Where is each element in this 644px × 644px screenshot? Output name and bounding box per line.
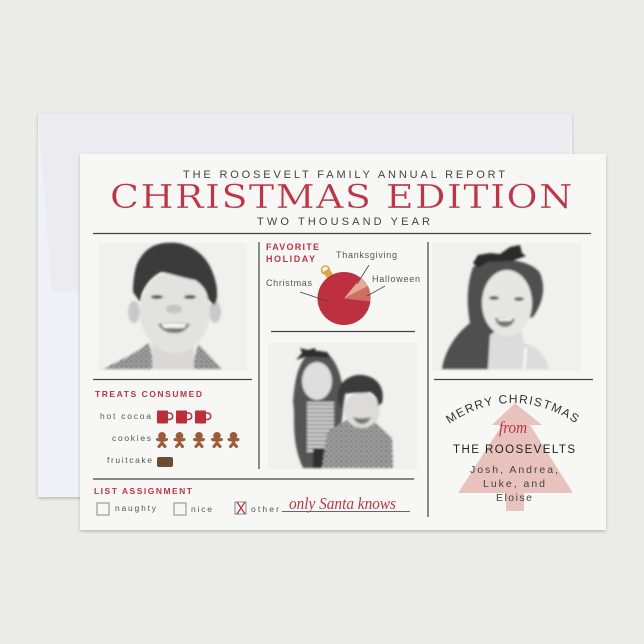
photo: girl [432, 243, 582, 371]
report subtitle: THE ROOSEVELT FAMILY ANNUAL REPORT [183, 169, 505, 181]
pie labels: Christmas [266, 278, 312, 288]
header text block [110, 169, 572, 228]
heading: list assignment: LIST ASSIGNMENT [94, 486, 193, 496]
row: fruitcake: fruitcake [107, 455, 152, 465]
pie chart ornament [318, 272, 371, 325]
names: Eloise [496, 492, 532, 504]
envelope [38, 113, 572, 497]
heading: favorite holiday: HOLIDAY [266, 254, 315, 264]
card panel [80, 154, 606, 530]
panel: treats consumed [95, 389, 238, 467]
family name: THE ROOSEVELTS [453, 444, 575, 456]
names [470, 464, 558, 504]
option: nice [174, 503, 212, 515]
panel: list assignment [94, 486, 410, 515]
option: other checked: other [251, 504, 279, 514]
pie labels: Thanksgiving [336, 250, 397, 260]
names: Luke, and [483, 478, 545, 490]
script from: from [499, 418, 527, 437]
row: cookies [112, 432, 238, 446]
grid rules [93, 234, 593, 517]
row: hot cocoa [100, 410, 211, 424]
row: cookies: cookies [112, 433, 151, 443]
heading: treats consumed: TREATS CONSUMED [95, 389, 202, 399]
option: naughty [97, 503, 157, 515]
photo: boy [98, 243, 247, 371]
names: Josh, Andrea, [470, 464, 558, 476]
option: other checked [235, 502, 279, 514]
icon: pink christmas tree [458, 403, 573, 511]
pie leader lines [300, 265, 385, 301]
pie labels: Halloween [372, 274, 420, 284]
pie labels [266, 250, 420, 288]
heading: favorite holiday: FAVORITE [266, 242, 319, 252]
panel: greeting [446, 394, 578, 511]
arc guide for greeting [449, 403, 577, 424]
panel: favorite holiday [266, 242, 420, 325]
photo: siblings [268, 343, 417, 469]
year line: TWO THOUSAND YEAR [257, 216, 430, 228]
main title: CHRISTMAS EDITION [110, 178, 572, 216]
row: fruitcake [107, 455, 173, 467]
icon: ornament cap [322, 266, 333, 278]
heading: favorite holiday [266, 242, 319, 264]
curved greeting: MERRY CHRISTMAS [446, 394, 578, 424]
handwritten answer: only Santa knows [289, 494, 396, 513]
option: naughty: naughty [115, 503, 157, 513]
row: hot cocoa: hot cocoa [100, 411, 151, 421]
option: nice: nice [191, 504, 212, 514]
